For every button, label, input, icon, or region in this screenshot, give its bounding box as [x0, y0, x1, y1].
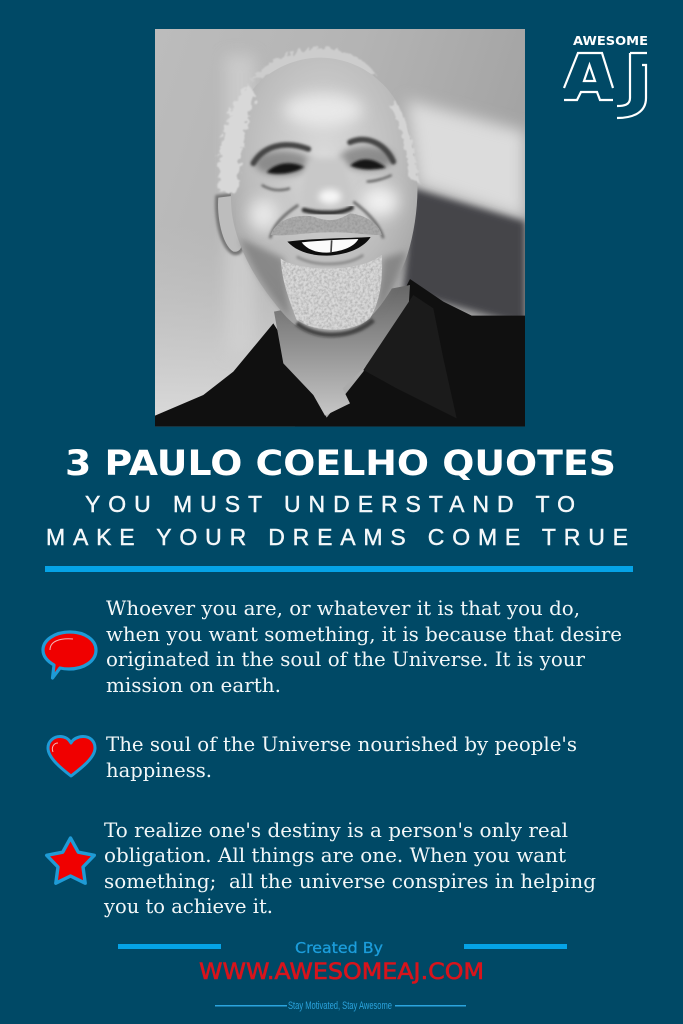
- hair left side: [218, 84, 256, 193]
- chin shadow: [297, 320, 373, 335]
- icon: star: [47, 838, 94, 883]
- icon: speech bubble: [43, 632, 96, 678]
- icon: heart: [48, 736, 95, 776]
- heading divider: [45, 566, 633, 572]
- subtitle: YOU MUST UNDERSTAND TO: [85, 491, 575, 517]
- quote 1: Whoever you are, or whatever it is that you do,: [106, 596, 580, 620]
- cheek highlights: [248, 198, 278, 232]
- moustache: [271, 213, 382, 235]
- eyebrows: [253, 145, 308, 163]
- jaw shading: [240, 238, 407, 318]
- logo wordmark: AWESOME: [573, 33, 648, 48]
- hair right side: [392, 100, 418, 182]
- subtitle: [46, 491, 628, 550]
- quote 3: [103, 818, 596, 918]
- quote 3: obligation. All things are one. When you want: [104, 843, 566, 867]
- goatee: [281, 255, 382, 330]
- mouth: [287, 237, 371, 256]
- forehead highlight: [283, 93, 363, 127]
- quote 1: when you want something, it is because that desire: [106, 622, 622, 646]
- smile lines: [270, 202, 383, 238]
- quote 2: happiness.: [106, 758, 212, 782]
- ear: [215, 192, 245, 255]
- teeth: [302, 239, 358, 253]
- quote 1: originated in the soul of the Universe. It is your: [106, 647, 585, 671]
- quote 2: [106, 732, 577, 782]
- footer: created by: Created By: [295, 939, 383, 957]
- quote 3: something; all the universe conspires in helping: [104, 869, 596, 893]
- footer: tagline: Stay Motivated, Stay Awesome: [288, 1000, 392, 1012]
- head: [231, 58, 417, 337]
- eyes: [267, 163, 305, 174]
- logo letter J: [617, 53, 647, 118]
- photo: portrait of Paulo Coelho: [155, 29, 525, 427]
- title: 3 PAULO COELHO QUOTES: [65, 444, 616, 484]
- under-eye creases: [262, 175, 392, 190]
- quote 3: To realize one's destiny is a person's only real: [104, 818, 568, 842]
- shirt: [155, 279, 525, 427]
- neck: [274, 285, 410, 416]
- quote 3: you to achieve it.: [103, 894, 273, 918]
- collar: [363, 295, 457, 418]
- eye socket shadows: [255, 151, 312, 176]
- quote 1: mission on earth.: [106, 673, 281, 697]
- lower lip: [297, 255, 363, 264]
- subtitle: MAKE YOUR DREAMS COME TRUE: [46, 524, 628, 550]
- footer: website: WWW.AWESOMEAJ.COM: [199, 960, 484, 985]
- nose: [300, 156, 350, 194]
- top hair fuzz: [250, 48, 377, 80]
- quote 2: The soul of the Universe nourished by people's: [106, 732, 577, 756]
- quote 1: [106, 596, 622, 697]
- logo: Awesome AJ: [564, 33, 648, 118]
- logo letter A: [564, 53, 613, 100]
- footer: created by: [118, 939, 567, 957]
